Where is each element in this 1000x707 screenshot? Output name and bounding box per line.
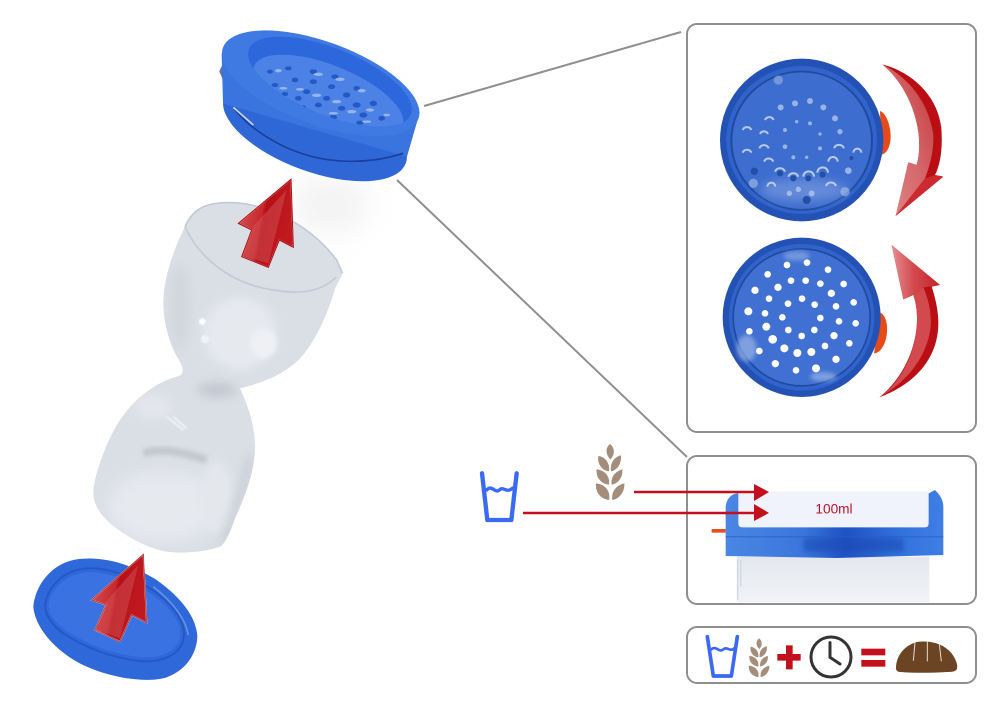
icon: clock [811,637,851,677]
arrow: upward, bottom cap to bottle [92,554,147,642]
clear jar body [737,557,929,602]
closed lid, top view [720,59,891,221]
icon: wheat ear [596,444,624,500]
orange tab [712,529,726,533]
icon: wheat ear small [749,638,769,677]
panel: measuring to 100 ml line [687,456,976,604]
curved arrow: rotate open [879,245,940,397]
sieve holes [744,259,859,374]
cap inner wall [237,18,423,145]
dented hole marks [743,117,861,187]
orange tab [219,56,237,87]
cap floor with dimples [254,54,404,126]
plus sign [777,645,801,669]
arrow: flour into container [634,484,769,501]
cap body [210,58,420,202]
panel: equation water plus flour plus time equals bread [687,627,976,683]
arrow: water into container [523,504,769,521]
100ml label: 100ml [815,501,853,516]
bottle rim [185,203,343,292]
lower bottle frosting [197,383,237,397]
icon: glass of water [482,473,517,520]
blue lid collar [726,490,943,558]
bottom cap: blue lid [33,559,197,680]
upper bottle highlights [206,300,274,368]
cap rim [209,9,433,158]
open lid, top view with holes [723,238,887,397]
equals sign [861,649,885,667]
top cap: perforated blue lid in 3D view [219,30,420,182]
arrow: upward, bottle to top cap [238,179,293,267]
icon: bread loaf [896,641,957,673]
bottle: translucent hourglass container [93,203,343,553]
panel: rotation of sieve lid [687,24,976,432]
curved arrow: rotate closed [882,64,943,216]
soft shadow behind top arrow [290,175,370,235]
icon: glass of water small [707,637,737,676]
white fill window [738,492,929,527]
connector line to measure panel [397,180,687,457]
connector line to rotation panel [424,32,681,106]
